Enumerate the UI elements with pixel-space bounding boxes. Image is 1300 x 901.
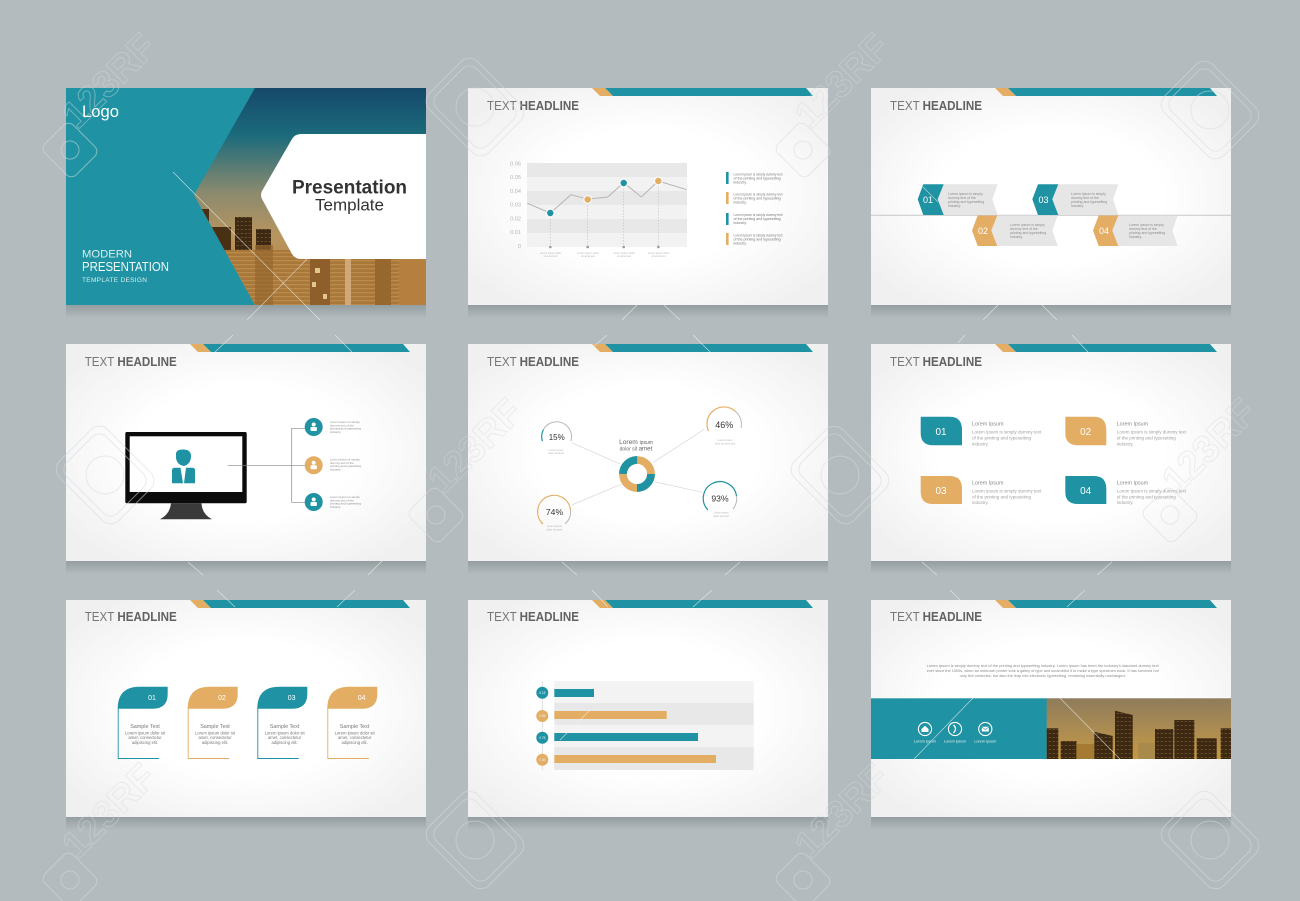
- line chart: Lorem ipsum dolor: [613, 251, 635, 255]
- ring 74%: [538, 495, 571, 532]
- timeline step 04: printing and typesetting: [1129, 231, 1165, 235]
- panel: line chart slide: [468, 88, 828, 318]
- tile 03: 03: [935, 486, 947, 497]
- heading: TEXT HEADLINE: [85, 609, 177, 624]
- timeline step 04: industry.: [1129, 235, 1142, 239]
- donut chart: Lorem ipsum: [619, 439, 653, 446]
- icon: monitor: [125, 432, 247, 519]
- heading: TEXT HEADLINE: [487, 354, 579, 369]
- ring 46%: 46%: [715, 420, 733, 430]
- timeline step 01: [918, 184, 998, 215]
- panel: bar chart slide: [468, 600, 828, 830]
- paragraph: only five centuries, but also the leap into electronic typesetting, remaining essentially unchanged.: [960, 674, 1126, 678]
- line chart: Lorem ipsum dolor: [540, 251, 561, 255]
- node 3: [305, 493, 361, 511]
- connector lines: [228, 428, 305, 502]
- heading: TEXT HEADLINE: [890, 98, 982, 113]
- card 03: 03: [288, 695, 296, 702]
- legend: industry.: [734, 242, 747, 246]
- heading: TEXT HEADLINE: [890, 354, 982, 369]
- line chart: sit amet text: [544, 254, 558, 258]
- node 1: [305, 418, 361, 436]
- ring 15%: 15%: [549, 433, 565, 442]
- panel: monitor slide: [66, 344, 426, 574]
- card 02: [188, 687, 238, 758]
- header ribbon: [995, 344, 1217, 352]
- watermark: crossing lines: [173, 172, 1120, 759]
- node 3: Lorem Ipsum is simply: [330, 495, 360, 499]
- icon: home: Lorem ipsum: [914, 740, 936, 744]
- ring 15%: Lorem ipsum: [548, 448, 564, 452]
- tile 02: Lorem Ipsum: [1117, 422, 1149, 428]
- card 02: Lorem ipsum dolor sit: [195, 730, 236, 736]
- paragraph: [927, 664, 1160, 678]
- line chart: Lorem ipsum dolor: [577, 251, 599, 255]
- card 04: adipiscing elit.: [341, 740, 368, 745]
- bar chart: 0.75: [539, 736, 546, 740]
- legend: industry.: [734, 180, 747, 184]
- tile 03: of the printing and typesetting: [972, 494, 1032, 500]
- bar chart: 0.85: [539, 758, 546, 762]
- ring 93%: Lorem ipsum: [714, 510, 728, 514]
- tile 01: Lorem Ipsum: [972, 422, 1004, 428]
- node 1: industry.: [330, 430, 341, 434]
- card 04: [327, 687, 377, 758]
- cover title: Presentation: [292, 178, 407, 198]
- tile 02: [1065, 417, 1187, 446]
- timeline step 02: [972, 216, 1058, 246]
- tile 01: Lorem Ipsum is simply dummy text: [972, 430, 1042, 434]
- watermark: 123RF text: 123RF: [54, 26, 165, 137]
- ring 93%: [703, 482, 737, 518]
- donut chart: [619, 439, 653, 488]
- timeline step 03: [1032, 184, 1118, 215]
- line chart: sit amet text: [617, 254, 631, 258]
- line chart: 0.03: [510, 202, 521, 208]
- heading: TEXT HEADLINE: [85, 354, 177, 369]
- card 03: amet, consectetur: [268, 735, 302, 740]
- card 04: 04: [358, 695, 366, 702]
- tile 01: of the printing and typesetting: [972, 436, 1032, 440]
- timeline step 02: industry.: [1010, 235, 1023, 239]
- cover white title shape: [261, 134, 426, 259]
- line chart: [510, 162, 687, 258]
- legend: of the printing and typesetting: [734, 196, 781, 200]
- card 01: [118, 687, 168, 758]
- legend: [726, 172, 782, 246]
- ring 46%: Lorem ipsum: [718, 438, 732, 442]
- tile 01: industry.: [972, 442, 989, 446]
- line chart: 0.01: [510, 230, 521, 236]
- panel: cover slide: [66, 88, 426, 318]
- node 3: industry.: [330, 505, 341, 509]
- timeline step 01: industry.: [948, 204, 961, 208]
- tile 04: Lorem Ipsum: [1117, 480, 1149, 486]
- icon: mail: Lorem ipsum: [974, 740, 996, 744]
- tile 04: industry.: [1117, 500, 1133, 505]
- node 1: printing and typesetting: [330, 427, 361, 431]
- ring 15%: [542, 422, 572, 455]
- tile 01: [921, 417, 1042, 446]
- card 03: [257, 687, 307, 758]
- timeline step 02: dummy text of the: [1010, 227, 1038, 231]
- timeline step 04: Lorem Ipsum is simply: [1129, 223, 1164, 227]
- cover subtitle: TEMPLATE DESIGN: [82, 277, 147, 284]
- heading: TEXT HEADLINE: [890, 609, 982, 624]
- cover subtitle: MODERN: [82, 248, 132, 260]
- heading: TEXT HEADLINE: [487, 98, 579, 113]
- node 3: dummy text of the: [330, 498, 354, 502]
- card 04: Lorem ipsum dolor sit: [335, 730, 375, 736]
- node 1: dummy text of the: [330, 423, 354, 427]
- icon: phone: [944, 722, 966, 744]
- line chart: sit amet text: [581, 254, 595, 258]
- legend: Lorem Ipsum is simply dummy text: [734, 234, 782, 238]
- card 01: Lorem ipsum dolor sit: [125, 730, 166, 736]
- card 01: adipiscing elit.: [132, 740, 158, 745]
- card 02: adipiscing elit.: [202, 740, 228, 745]
- timeline step 03: industry.: [1071, 204, 1084, 208]
- panel: timeline chevrons slide: [871, 88, 1231, 318]
- legend: Lorem Ipsum is simply dummy text: [734, 192, 782, 196]
- timeline step 02: printing and typesetting: [1010, 231, 1046, 235]
- bar chart: 0.15: [539, 691, 546, 695]
- watermark: 123RF text: 123RF: [54, 756, 165, 867]
- paragraph: Lorem Ipsum is simply dummy text of the printing and typesetting industry. Lorem Ipsum has been the industry's standard dummy text: [927, 664, 1160, 668]
- line chart: 0.05: [510, 175, 521, 181]
- card 02: amet, consectetur: [198, 735, 232, 740]
- legend: Lorem Ipsum is simply dummy text: [734, 213, 782, 217]
- tile 02: of the printing and typesetting: [1117, 436, 1176, 440]
- line chart: 0.04: [510, 189, 521, 195]
- bar chart: 0.55: [539, 714, 546, 718]
- tile 03: Lorem Ipsum: [972, 480, 1004, 486]
- logo: Logo: [82, 102, 119, 121]
- icon: mail: [974, 722, 996, 744]
- timeline step 04: 04: [1099, 226, 1109, 236]
- tile 04: [1065, 476, 1187, 505]
- legend: industry.: [734, 221, 747, 225]
- tile 03: [921, 476, 1042, 505]
- watermark: 123RF text: 123RF: [787, 756, 898, 867]
- line chart: Lorem ipsum dolor: [648, 251, 669, 255]
- header ribbon: [190, 600, 410, 608]
- card 01: 01: [148, 695, 156, 702]
- node 2: Lorem Ipsum is simply: [330, 458, 360, 462]
- tile 01: 01: [935, 427, 947, 438]
- header ribbon: [592, 600, 813, 608]
- timeline step 01: dummy text of the: [948, 196, 976, 200]
- teal band: [871, 698, 1047, 759]
- timeline step 03: printing and typesetting: [1071, 200, 1107, 204]
- card 04: Sample Text: [340, 724, 370, 730]
- timeline step 04: [1093, 216, 1178, 246]
- header ribbon: [592, 344, 813, 352]
- card 03: adipiscing elit.: [271, 740, 298, 745]
- ring 15%: dolor sit amet: [548, 451, 564, 455]
- tile 04: of the printing and typesetting: [1117, 494, 1176, 500]
- timeline step 02: Lorem Ipsum is simply: [1010, 223, 1045, 227]
- connector arrows: [572, 429, 704, 505]
- tile 03: industry.: [972, 500, 989, 505]
- ring 46%: dolor sit amet text: [715, 442, 736, 446]
- ring 74%: dolor sit amet: [547, 528, 563, 532]
- line chart: sit amet text: [652, 254, 666, 258]
- paragraph: ever since the 1500s, when an unknown printer took a galley of type and scrambled it to make a type specimen book. It has survived not: [927, 669, 1160, 673]
- ring 93%: 93%: [711, 494, 729, 504]
- icon: home: [914, 722, 936, 744]
- timeline step 03: Lorem Ipsum is simply: [1071, 192, 1106, 196]
- timeline step 03: 03: [1038, 195, 1049, 205]
- timeline step 01: printing and typesetting: [948, 200, 984, 204]
- header ribbon: [592, 88, 813, 96]
- cover title: Template: [315, 196, 384, 214]
- node 2: printing and typesetting: [330, 464, 361, 468]
- legend: Lorem Ipsum is simply dummy text: [734, 172, 782, 176]
- timeline step 04: dummy text of the: [1129, 227, 1157, 231]
- node 2: industry.: [330, 468, 341, 472]
- cover title: [292, 178, 407, 214]
- tile 02: 02: [1080, 427, 1092, 438]
- tile 04: 04: [1080, 486, 1092, 497]
- tile 02: Lorem Ipsum is simply dummy text: [1117, 430, 1187, 434]
- header ribbon: [995, 600, 1217, 608]
- heading: TEXT HEADLINE: [487, 609, 579, 624]
- watermark: 123RF text: 123RF: [787, 26, 898, 137]
- header ribbon: [190, 344, 410, 352]
- node 2: dummy text of the: [330, 461, 354, 465]
- node 3: printing and typesetting: [330, 502, 361, 506]
- header ribbon: [995, 88, 1217, 96]
- timeline step 03: dummy text of the: [1071, 196, 1099, 200]
- cover city image: [190, 88, 426, 305]
- cover subtitle: PRESENTATION: [82, 260, 169, 274]
- card 02: Sample Text: [200, 724, 230, 730]
- panel: numbered tiles slide: [871, 344, 1231, 574]
- card 01: amet, consectetur: [128, 735, 162, 740]
- line chart: 0.02: [510, 216, 521, 222]
- legend: of the printing and typesetting: [734, 176, 781, 180]
- panel: city banner slide: [871, 600, 1231, 830]
- timeline step 01: 01: [923, 195, 933, 205]
- city image: [1047, 698, 1231, 759]
- panel: leaf cards slide: [66, 600, 426, 830]
- tile 03: Lorem Ipsum is simply dummy text: [972, 488, 1042, 494]
- line chart: 0.06: [510, 162, 521, 168]
- legend: industry.: [734, 200, 747, 204]
- cover subtitle: [82, 248, 169, 284]
- tile 02: industry.: [1117, 442, 1133, 446]
- legend: of the printing and typesetting: [734, 238, 781, 242]
- icon: phone: Lorem ipsum: [944, 740, 966, 744]
- timeline step 01: Lorem Ipsum is simply: [948, 192, 983, 196]
- icon: person on screen: [172, 449, 195, 483]
- bar chart: [536, 681, 754, 770]
- line chart: 0: [518, 244, 521, 250]
- watermark: 123RF text: 123RF: [420, 391, 531, 502]
- tile 04: Lorem Ipsum is simply dummy text: [1117, 488, 1187, 494]
- card 03: Lorem ipsum dolor sit: [265, 730, 305, 736]
- timeline step 02: 02: [978, 226, 988, 236]
- donut chart: dolor sit amet: [620, 446, 653, 452]
- ring 74%: 74%: [546, 507, 563, 517]
- ring 93%: dolor sit amet: [713, 514, 729, 518]
- card 02: 02: [218, 695, 226, 702]
- node 2: [305, 456, 361, 474]
- ring 46%: [707, 407, 741, 446]
- card 03: Sample Text: [270, 724, 300, 730]
- card 01: Sample Text: [130, 724, 160, 730]
- card 04: amet, consectetur: [338, 735, 372, 740]
- node 1: Lorem Ipsum is simply: [330, 420, 360, 424]
- panel: donut percentages slide: [468, 344, 828, 574]
- legend: of the printing and typesetting: [734, 217, 781, 221]
- watermark: 123RF text: 123RF: [1154, 391, 1265, 502]
- ring 74%: Lorem ipsum: [547, 524, 562, 528]
